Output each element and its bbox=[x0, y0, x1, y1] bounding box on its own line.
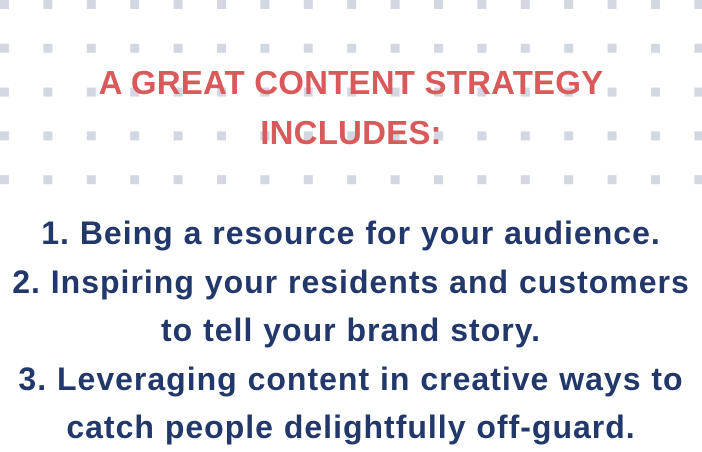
list text: 1. Being a resource for your audience. bbox=[41, 215, 661, 251]
list text: catch people delightfully off-guard. bbox=[66, 409, 636, 445]
list text bbox=[12, 215, 690, 445]
list text: to tell your brand story. bbox=[161, 312, 541, 348]
title: INCLUDES: bbox=[260, 114, 442, 151]
list text: 2. Inspiring your residents and customers bbox=[12, 264, 690, 300]
title: A GREAT CONTENT STRATEGY bbox=[99, 64, 603, 101]
title bbox=[99, 64, 603, 151]
list text: 3. Leveraging content in creative ways to bbox=[18, 360, 684, 396]
